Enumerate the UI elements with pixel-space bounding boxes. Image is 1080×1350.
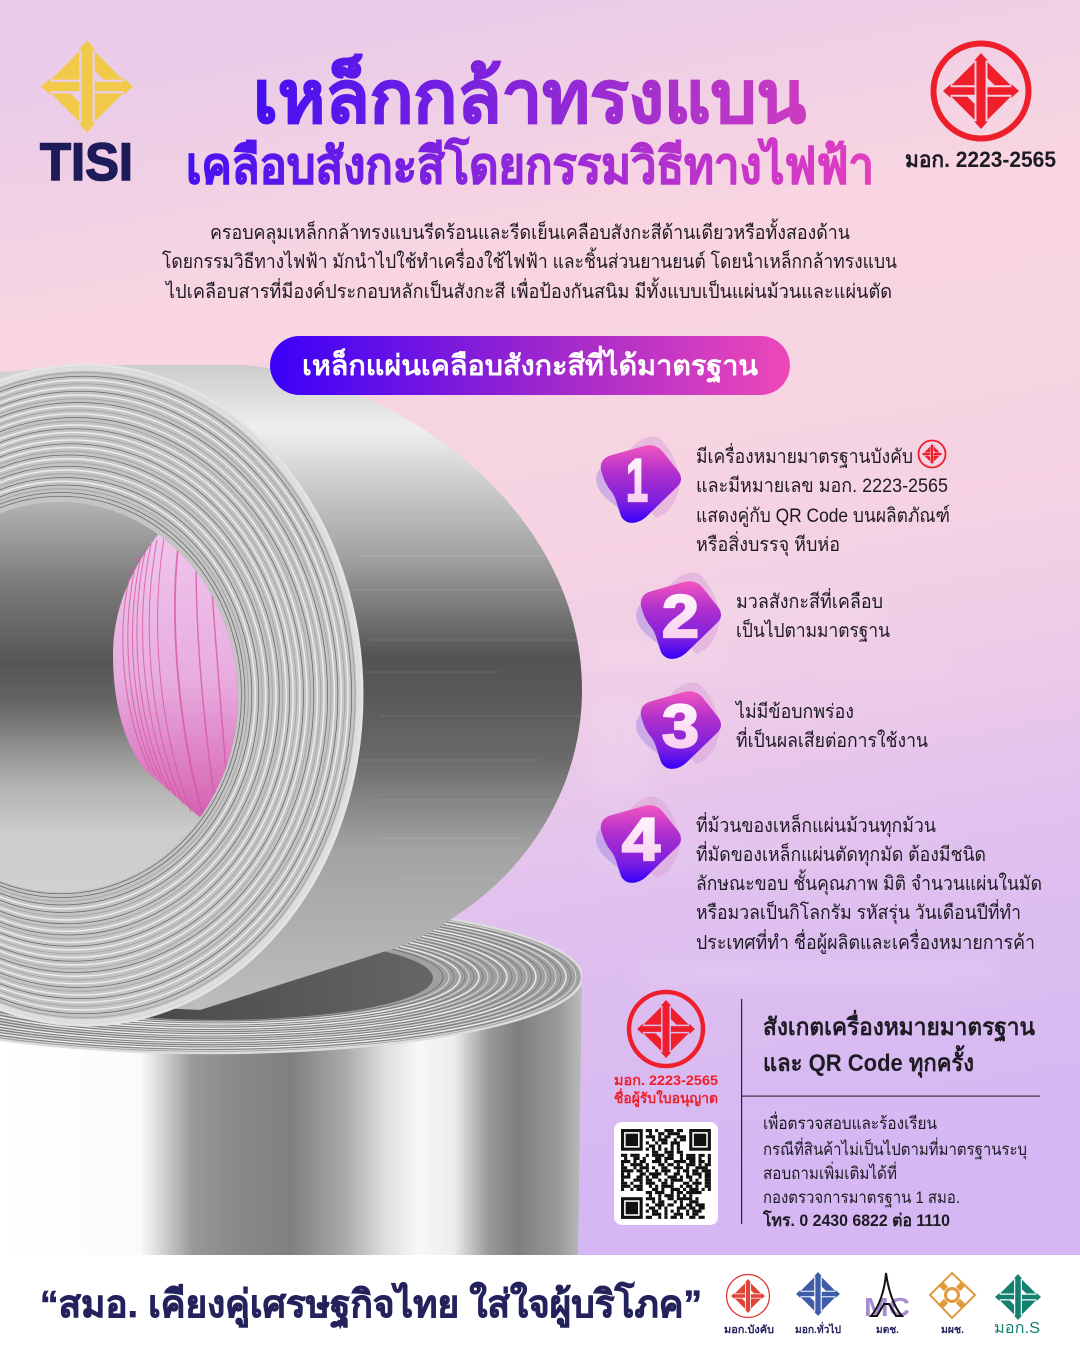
badge 1: 1 [626,447,648,514]
notice heading [763,1009,1036,1079]
logo: mandatory standard [724,1274,774,1336]
licence caption [614,1072,718,1107]
item 1 text [696,443,950,557]
item 3 text [734,700,928,752]
item 4 text [696,812,1042,955]
yellow TISI diamond mark [41,40,133,132]
notice heading: และ QR Code ทุกครั้ง [763,1044,974,1079]
pink view through the coil [113,534,238,818]
item 4 [596,797,1042,955]
TISI wordmark: TISI [40,133,133,192]
badge 4: 4 [622,806,661,873]
intro paragraph [162,218,897,303]
item 2 text: เป็นไปตามมาตรฐาน [736,618,890,642]
logo: S standard [994,1274,1041,1337]
title line 1: เหล็กกล้าทรงแบน [253,54,806,138]
licence mark and QR panel [614,992,718,1225]
item 1 text: มีเครื่องหมายมาตรฐานบังคับ [696,443,913,468]
licence caption: มอก. 2223-2565 [614,1072,718,1088]
intro paragraph: โดยกรรมวิธีทางไฟฟ้า มักนำไปใช้ทำเครื่องใช้ไฟฟ้า และชิ้นส่วนยานยนต์ โดยนำเหล็กกล้าทรงแบน [162,247,897,273]
red licence mark [629,992,703,1066]
vertical divider [741,999,742,1224]
title [186,54,874,194]
item 1 text: และมีหมายเลข มอก. 2223-2565 [696,475,948,497]
item 4 text: ที่มัดของเหล็กแผ่นตัดทุกมัด ต้องมีชนิด [696,841,986,867]
logo: general standard [795,1272,841,1336]
item 2 text [736,588,890,642]
lower steel coil [0,901,582,1255]
QR code [614,1122,718,1225]
lower coil side wall [0,977,582,1255]
logo: S standard: มอก.S [994,1320,1040,1337]
notice body text: โทร. 0 2430 6822 ต่อ 1110 [762,1210,950,1230]
item 2 text: มวลสังกะสีที่เคลือบ [736,588,883,613]
upper steel coil [0,365,582,1025]
logo: community product standard: มผช. [941,1324,964,1336]
badge 3: 3 [662,693,699,760]
TISI logo [40,40,133,192]
coil outer body [0,365,582,1010]
badge 2: 2 [662,583,699,650]
lower coil top face [0,918,582,1054]
coil front face rings [0,365,362,1025]
footer band [0,1255,1080,1350]
item 4 text: ลักษณะขอบ ชั้นคุณภาพ มิติ จำนวนแผ่นในมัด [696,869,1042,896]
footer slogan: “สมอ. เคียงคู่เศรษฐกิจไทย ใส่ใจผู้บริโภค” [40,1281,702,1329]
item 1 [596,437,950,557]
notice rule [742,1096,1040,1097]
notice body text: กรณีที่สินค้าไม่เป็นไปตามที่มาตรฐานระบุ [763,1137,1027,1160]
licence caption: ชื่อผู้รับใบอนุญาต [614,1088,718,1107]
standard number: มอก. 2223-2565 [905,147,1056,172]
item 4 text: ประเทศที่ทำ ชื่อผู้ผลิตและเครื่องหมายการค้า [696,929,1035,955]
coil inner hole [0,502,238,892]
logo: voluntary standard tower [864,1273,910,1336]
title line 2: เคลือบสังกะสีโดยกรรมวิธีทางไฟฟ้า [186,136,874,194]
small red standard mark [918,440,946,468]
notice body text: สอบถามเพิ่มเติมได้ที่ [763,1161,897,1183]
logo: general standard: มอก.ทั่วไป [795,1321,841,1336]
logo: voluntary standard tower: MC [864,1292,910,1322]
notice body text [762,1111,1027,1230]
intro paragraph: ครอบคลุมเหล็กกล้าทรงแบนรีดร้อนและรีดเย็นเคลือบสังกะสีด้านเดียวหรือทั้งสองด้าน [210,218,850,245]
badge 1 [596,437,681,523]
item 4 text: หรือมวลเป็นกิโลกรัม รหัสรุ่น วันเดือนปีที่ทำ [696,899,1021,925]
logo: community product standard [930,1273,975,1336]
item 1 text: แสดงคู่กับ QR Code บนผลิตภัณฑ์ [696,504,950,528]
standard mark, top right [905,44,1056,172]
item 3 [636,683,928,769]
logo: mandatory standard: มอก.บังคับ [724,1324,774,1336]
section heading pill [270,336,790,395]
badge 2 [636,573,721,659]
item 4 text: ที่ม้วนของเหล็กแผ่นม้วนทุกม้วน [696,812,936,838]
badge 4 [596,797,681,883]
notice panel [742,1009,1040,1230]
notice heading: สังเกตเครื่องหมายมาตรฐาน [763,1009,1036,1043]
badge 3 [636,683,721,769]
red standard circle mark [934,44,1028,138]
logo: voluntary standard tower: มตช. [876,1324,899,1336]
item 1 text: หรือสิ่งบรรจุ หีบห่อ [696,531,840,557]
item 3 text: ไม่มีข้อบกพร่อง [734,700,854,723]
item 3 text: ที่เป็นผลเสียต่อการใช้งาน [736,727,928,752]
notice body text: กองตรวจการมาตรฐาน 1 สมอ. [763,1188,960,1208]
intro paragraph: ไปเคลือบสารที่มีองค์ประกอบหลักเป็นสังกะสี เพื่อป้องกันสนิม มีทั้งแบบเป็นแผ่นม้วนและแผ่นตัด [164,277,892,303]
notice body text: เพื่อตรวจสอบและร้องเรียน [763,1111,937,1133]
section heading pill: เหล็กแผ่นเคลือบสังกะสีที่ได้มาตรฐาน [302,345,758,384]
item 2 [636,573,890,659]
